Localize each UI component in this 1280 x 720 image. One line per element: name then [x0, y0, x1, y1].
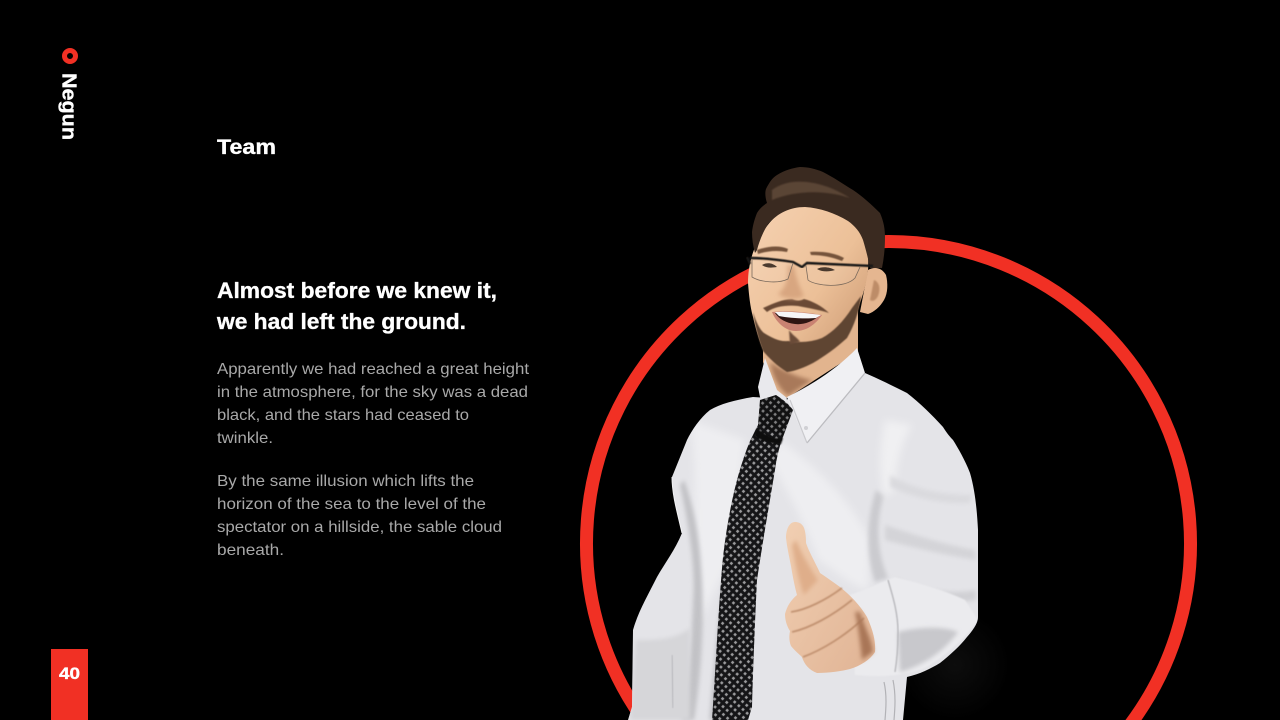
nose shadow: [778, 265, 804, 299]
collar: [758, 348, 865, 443]
paragraph 2: horizon of the sea to the level of the: [217, 496, 486, 513]
paragraph 2: [217, 473, 502, 559]
shirt: [628, 373, 978, 720]
hair: [752, 167, 885, 268]
page number tab: 40: [59, 665, 80, 683]
paragraph 1: in the atmosphere, for the sky was a dead: [217, 384, 528, 401]
neck: [763, 305, 858, 398]
paragraph 1: twinkle.: [217, 430, 273, 447]
bright outer edge of the shirt: [672, 477, 682, 533]
paragraph 1: Apparently we had reached a great height: [217, 361, 530, 378]
eyebrows: [757, 246, 844, 261]
red circle: [586, 241, 1190, 720]
beard: [753, 296, 861, 372]
ear: [860, 268, 887, 314]
head: [747, 167, 887, 372]
face: [748, 204, 868, 371]
necktie: [712, 395, 793, 720]
page number tab: [51, 649, 88, 720]
hand with thumb up: [785, 522, 875, 673]
paragraph 2: beneath.: [217, 542, 284, 559]
paragraph 2: By the same illusion which lifts the: [217, 473, 474, 490]
glasses: [747, 257, 873, 285]
mouth: [772, 311, 822, 331]
paragraph 1: [217, 361, 530, 447]
heading: Almost before we knew it,: [217, 278, 497, 303]
paragraph 1: black, and the stars had ceased to: [217, 407, 469, 424]
shirt shading: [630, 420, 978, 720]
moustache: [763, 299, 829, 313]
logo: red ring and brand name: Negun: [58, 73, 80, 140]
section label: Team: Team: [217, 136, 276, 159]
heading: we had left the ground.: [216, 309, 466, 334]
heading: [216, 278, 497, 334]
paragraph 2: spectator on a hillside, the sable cloud: [217, 519, 502, 536]
logo: red ring and brand name: [58, 50, 80, 140]
portrait: smiling man giving a thumbs up: [628, 167, 1010, 720]
faint shadow glow: [900, 610, 1010, 720]
